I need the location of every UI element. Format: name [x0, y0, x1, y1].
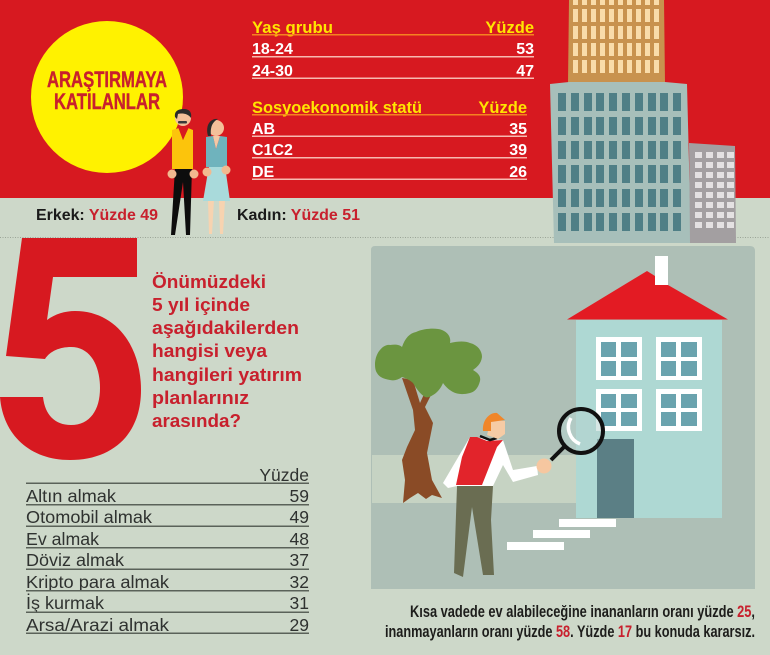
- yellow circle: participants: KATILANLAR: [54, 89, 160, 114]
- investment plans table: Arsa/Arazi almak: [26, 615, 169, 635]
- icon: buildings: [550, 0, 736, 243]
- icon: magnifying glass: [551, 409, 603, 460]
- steps: [507, 519, 616, 550]
- caption: [385, 603, 755, 641]
- investment plans table: Yüzde: [259, 465, 309, 485]
- panel: house illustration: [371, 246, 755, 589]
- age group table: 18-24: [252, 41, 293, 58]
- investment plans table: 37: [290, 550, 309, 570]
- investment plans table: 32: [290, 572, 309, 592]
- header band: [0, 0, 770, 198]
- investment plans table: [26, 465, 309, 635]
- socioeconomic status table: [252, 99, 527, 181]
- survey question: arasında?: [152, 411, 241, 431]
- age group table: 53: [516, 41, 534, 58]
- investment plans table: 59: [290, 486, 309, 506]
- survey question: hangileri yatırım: [152, 365, 302, 385]
- age group table: [252, 19, 534, 80]
- survey question: 5 yıl içinde: [152, 295, 250, 315]
- house windows: [596, 337, 702, 431]
- survey question: Önümüzdeki: [152, 272, 266, 292]
- female share: Kadın: Yüzde 51: [237, 207, 360, 224]
- socioeconomic status table: DE: [252, 164, 275, 181]
- icon: woman: [202, 119, 230, 234]
- age group table: 47: [516, 63, 534, 80]
- socioeconomic status table: 35: [509, 121, 527, 138]
- investment plans table: 49: [290, 507, 309, 527]
- big number 5: [0, 238, 141, 460]
- investment plans table: Otomobil almak: [26, 507, 152, 527]
- survey question: [152, 272, 302, 431]
- tall orange tower: [568, 0, 665, 83]
- socioeconomic status table: 39: [509, 142, 527, 159]
- icon: person with magnifier: [443, 413, 552, 577]
- icon: man: [168, 109, 198, 235]
- survey question: hangisi veya: [152, 341, 268, 361]
- investment plans table: 31: [290, 593, 309, 613]
- survey question: aşağıdakilerden: [152, 318, 299, 338]
- survey question: planlarınız: [152, 388, 249, 408]
- small grey building: [689, 143, 736, 243]
- socioeconomic status table: AB: [252, 121, 275, 138]
- investment plans table: 48: [290, 529, 309, 549]
- yellow circle: participants: [31, 21, 183, 173]
- icon: house: [567, 256, 728, 518]
- socioeconomic status table: C1C2: [252, 142, 293, 159]
- male share: Erkek: Yüzde 49: [36, 207, 158, 224]
- age group table: Yüzde: [485, 19, 534, 37]
- investment plans table: Döviz almak: [26, 550, 124, 570]
- icon: tree: [375, 329, 482, 503]
- investment plans table: 29: [290, 615, 309, 635]
- middle grey-green tower: [550, 82, 691, 243]
- socioeconomic status table: Yüzde: [478, 99, 527, 117]
- socioeconomic status table: Sosyoekonomik statü: [252, 99, 422, 117]
- age group table: Yaş grubu: [252, 19, 333, 37]
- socioeconomic status table: 26: [509, 164, 527, 181]
- investment plans table: İş kurmak: [26, 593, 104, 613]
- investment plans table: Kripto para almak: [26, 572, 169, 592]
- investment plans table: Altın almak: [26, 486, 116, 506]
- age group table: 24-30: [252, 63, 293, 80]
- investment plans table: Ev almak: [26, 529, 99, 549]
- yellow circle: participants: ARAŞTIRMAYA: [47, 67, 167, 92]
